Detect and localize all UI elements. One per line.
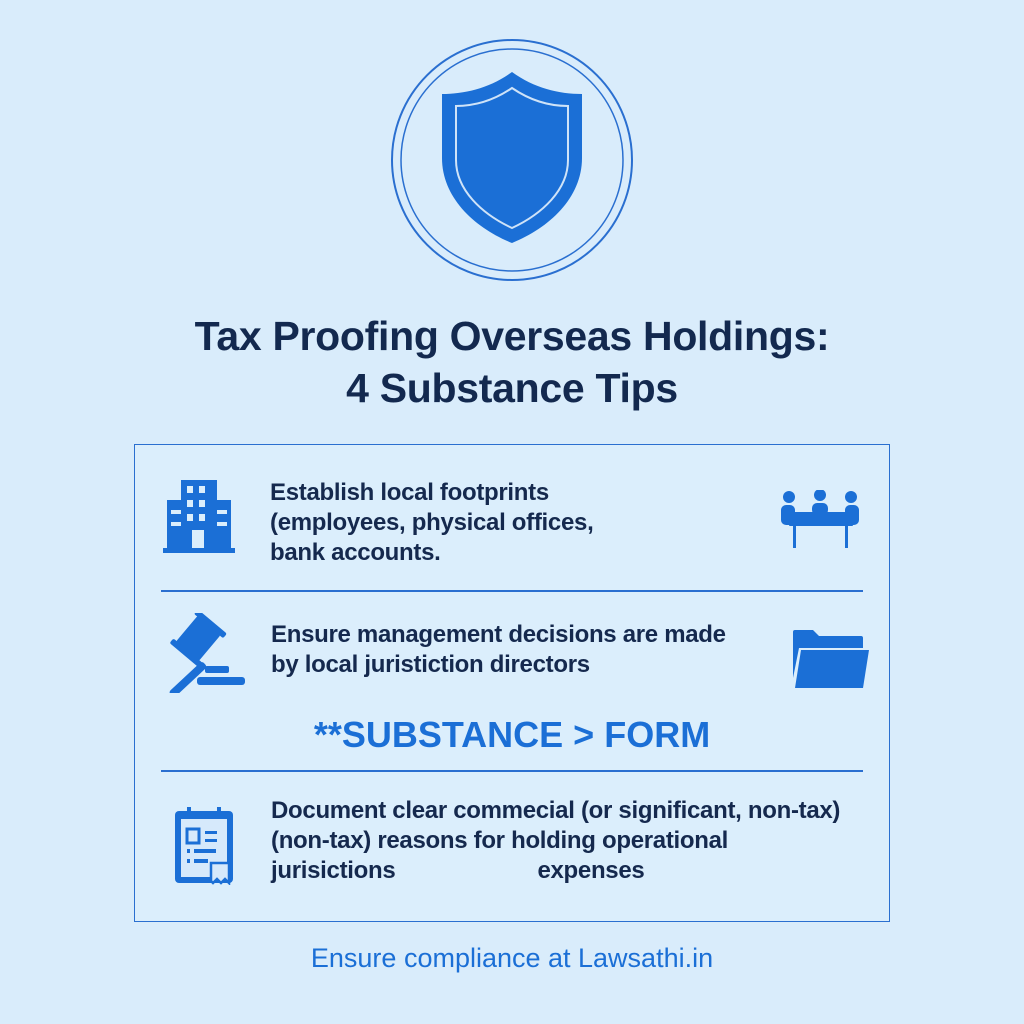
divider [161, 770, 863, 772]
text: tip 1: bank accounts. [270, 539, 441, 566]
divider [161, 590, 863, 592]
title: 4 Substance Tips [346, 365, 678, 411]
icon: folder [793, 630, 869, 688]
text: tip 1: (employees, physical offices, [270, 509, 593, 536]
callout: substance > form: **SUBSTANCE > FORM [314, 714, 710, 755]
text: tip 3: jurisictions expenses [271, 857, 644, 884]
footer: website: Ensure compliance at Lawsathi.in [311, 943, 713, 973]
text: tip 3 [270, 797, 840, 884]
text: tip 2: Ensure management decisions are made [271, 621, 726, 648]
icon: meeting table [781, 490, 859, 548]
icon: gavel [170, 613, 245, 693]
text: tip 3: Document clear commecial (or significant, non-tax) [271, 797, 840, 824]
text: tip 3: (non-tax) reasons for holding operational [271, 827, 728, 854]
panel: tips box [134, 444, 890, 922]
icon: shield in circle [391, 39, 633, 281]
icon: clipboard document [175, 807, 233, 885]
title: Tax Proofing Overseas Holdings: [195, 313, 829, 359]
text: tip 1 [270, 479, 593, 566]
title [195, 313, 829, 411]
text: tip 2 [271, 621, 726, 678]
icon: building [163, 480, 235, 553]
text: tip 2: by local juristiction directors [271, 651, 590, 678]
text: tip 1: Establish local footprints [270, 479, 549, 506]
